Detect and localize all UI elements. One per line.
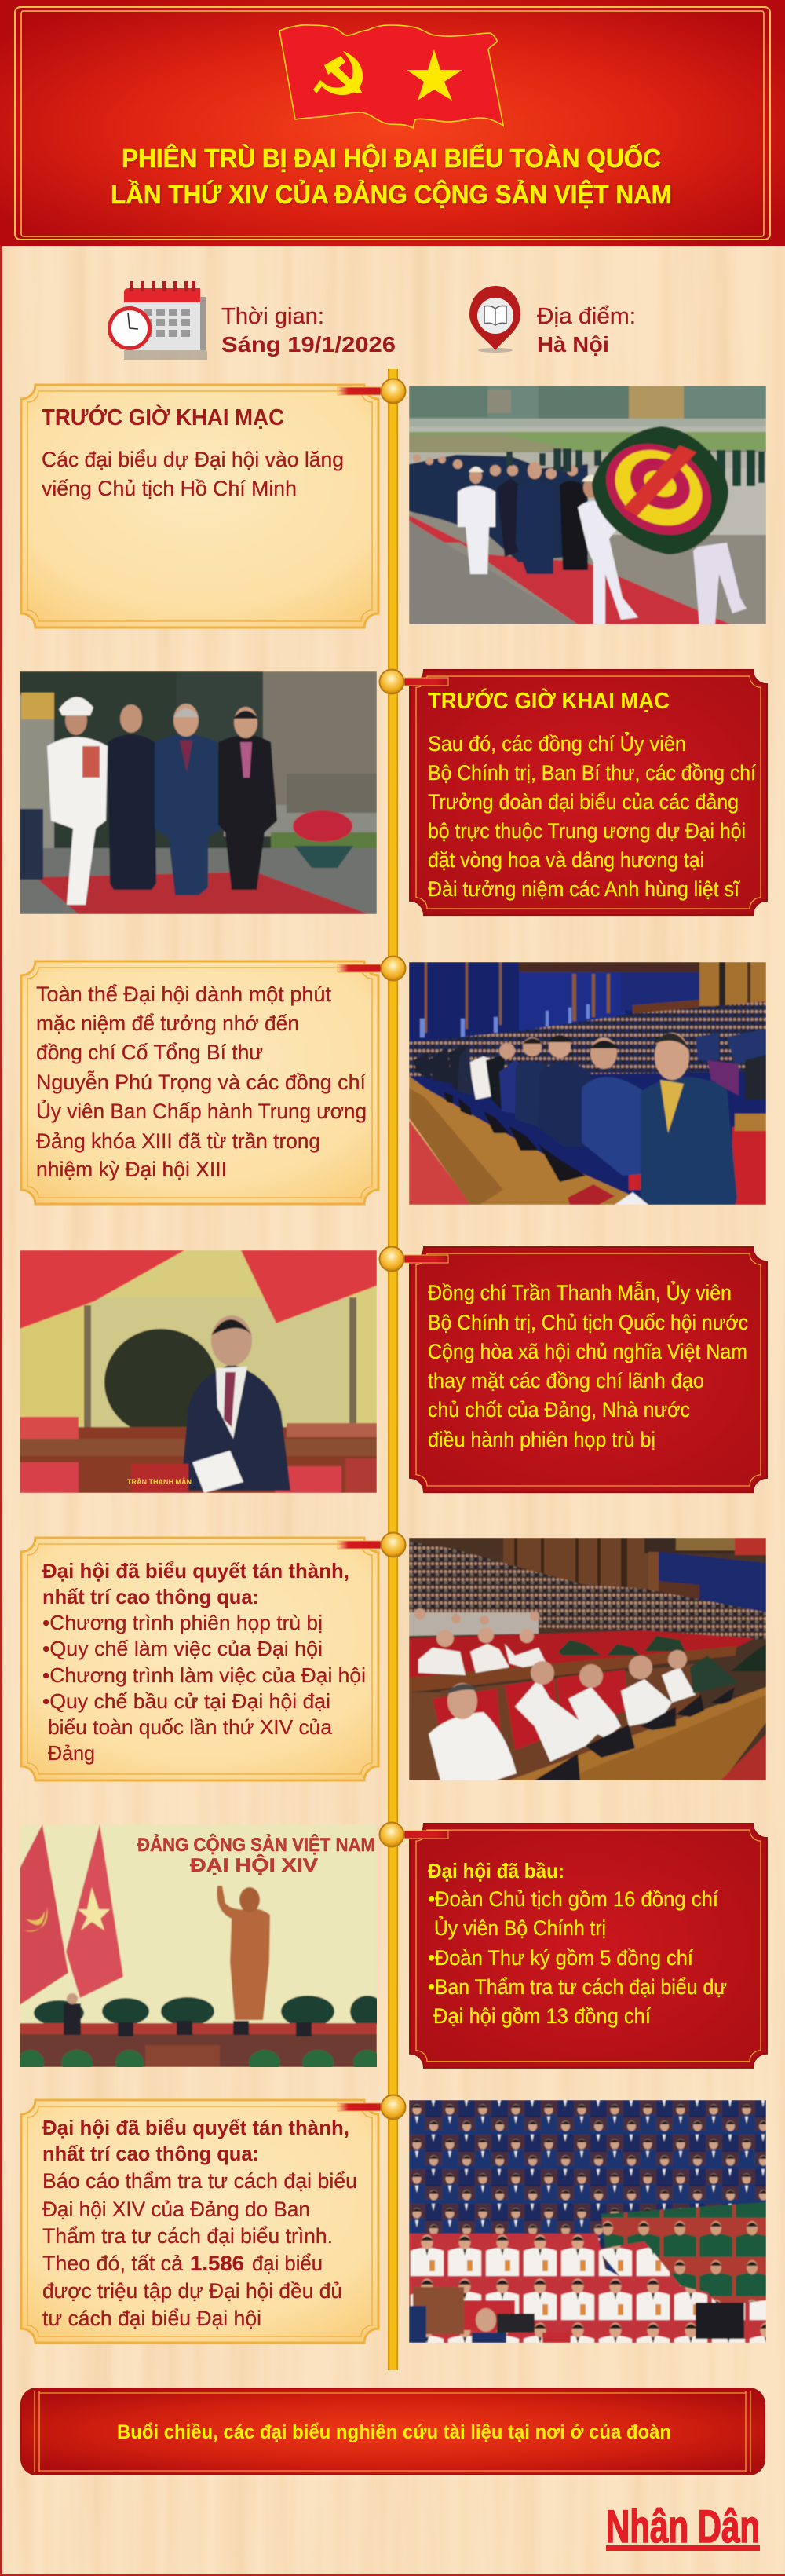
body text: đồng chí Cố Tổng Bí thư — [36, 1041, 263, 1064]
title: LẦN THỨ XIV CỦA ĐẢNG CỘNG SẢN VIỆT NAM — [111, 179, 672, 209]
body text: Bộ Chính trị, Chủ tịch Quốc hội nước — [428, 1311, 748, 1334]
time label: Thời gian: — [221, 304, 324, 329]
photo: leaders walking — [20, 671, 377, 914]
icon: party flag — [279, 25, 503, 128]
body text: 1.586 — [190, 2252, 244, 2275]
body text: thay mặt các đồng chí lãnh đạo — [428, 1369, 704, 1392]
connector: ribbon 4 — [404, 1255, 448, 1263]
connector: ribbon 6 — [404, 1831, 448, 1839]
bullet list: •Quy chế bầu cử tại Đại hội đại — [42, 1689, 330, 1713]
body text: Thẩm tra tư cách đại biểu trình. — [42, 2224, 333, 2248]
header banner — [0, 0, 785, 246]
title: PHIÊN TRÙ BỊ ĐẠI HỘI ĐẠI BIỂU TOÀN QUỐC — [122, 143, 661, 173]
name plate: TRẦN THANH MẪN — [127, 1477, 192, 1486]
body text: tư cách đại biểu Đại hội — [42, 2307, 261, 2330]
photo: minute of silence — [409, 962, 766, 1205]
body text: Toàn thể Đại hội dành một phút — [36, 982, 331, 1006]
body text: Đài tưởng niệm các Anh hùng liệt sĩ — [428, 877, 740, 901]
location label: Địa điểm: — [537, 304, 636, 329]
body text: Trưởng đoàn đại biểu của các đảng — [428, 790, 739, 814]
connector: ribbon 2 — [404, 678, 448, 686]
panel: step 1 text — [21, 385, 378, 628]
bold lead: Đại hội đã bầu: — [428, 1859, 564, 1883]
bold lead: nhất trí cao thông qua: — [42, 1585, 259, 1608]
stage sign: ĐẢNG CỘNG SẢN VIỆT NAM — [137, 1833, 375, 1856]
photo: congress stage — [17, 1824, 385, 2075]
photo: delegates voting — [409, 1538, 766, 1780]
location label — [537, 304, 636, 357]
connector: ribbon 3 — [338, 964, 381, 972]
body text — [42, 448, 344, 500]
icon: calendar with clock — [108, 281, 207, 360]
heading: TRƯỚC GIỜ KHAI MẠC — [428, 687, 670, 714]
body text: Cộng hòa xã hội chủ nghĩa Việt Nam — [428, 1340, 747, 1363]
connector: ribbon 7 — [338, 2103, 381, 2111]
afternoon banner — [21, 2388, 765, 2475]
timeline spine — [388, 369, 398, 2370]
panel: step 3 text — [21, 961, 378, 1204]
bold lead: Đại hội đã biểu quyết tán thành, — [42, 1559, 349, 1583]
body text: chủ chốt của Đảng, Nhà nước — [428, 1398, 690, 1422]
timeline knobs — [380, 379, 405, 2119]
bold lead: Đại hội đã biểu quyết tán thành, — [42, 2116, 349, 2139]
bullet list: biểu toàn quốc lần thứ XIV của — [48, 1715, 333, 1739]
connector: ribbon 5 — [338, 1541, 381, 1549]
body text: Ủy viên Ban Chấp hành Trung ương — [36, 1098, 367, 1123]
panel: step 2 text — [410, 670, 767, 915]
banner text: Buổi chiều, các đại biểu nghiên cứu tài liệu tại nơi ở của đoàn — [117, 2421, 671, 2443]
icon: yellow star — [407, 49, 462, 101]
location label: Hà Nội — [537, 332, 609, 357]
time label — [221, 304, 396, 357]
body text: Đại hội XIV của Đảng do Ban — [42, 2197, 310, 2221]
bullet list: Ủy viên Bộ Chính trị — [434, 1915, 606, 1940]
heading: TRƯỚC GIỜ KHAI MẠC — [42, 404, 284, 430]
bullet list: •Quy chế làm việc của Đại hội — [42, 1637, 323, 1660]
body text: Bộ Chính trị, Ban Bí thư, các đồng chí — [428, 761, 756, 785]
title — [111, 143, 672, 209]
panel: step 5 text — [21, 1538, 378, 1780]
body text: Sau đó, các đồng chí Ủy viên — [428, 730, 686, 756]
body text: Báo cáo thẩm tra tư cách đại biểu — [42, 2169, 357, 2193]
body text: Các đại biểu dự Đại hội vào lăng — [42, 448, 344, 471]
photo: delegates applauding — [409, 2100, 766, 2343]
photo: speaker at podium — [20, 1250, 377, 1493]
bullet list: Đại hội gồm 13 đồng chí — [433, 2004, 651, 2028]
body text — [36, 982, 367, 1181]
icon: hammer and sickle — [313, 51, 363, 95]
panel: step 4 text — [410, 1247, 767, 1492]
bullet list: •Đoàn Chủ tịch gồm 16 đồng chí — [428, 1887, 718, 1911]
bullet list: •Chương trình phiên họp trù bị — [42, 1611, 323, 1634]
bold lead — [42, 2116, 349, 2165]
connector: ribbon 1 — [338, 387, 381, 395]
body text: viếng Chủ tịch Hồ Chí Minh — [42, 477, 297, 500]
bullet list — [428, 1887, 727, 2028]
panel: step 6 text — [410, 1824, 767, 2068]
body text: mặc niệm để tưởng nhớ đến — [36, 1012, 299, 1035]
stage sign — [137, 1833, 375, 1876]
stage sign: ĐẠI HỘI XIV — [190, 1854, 318, 1876]
icon: location pin — [469, 286, 520, 353]
panel: step 7 text — [21, 2100, 378, 2343]
bullet list: •Đoàn Thư ký gồm 5 đồng chí — [428, 1946, 693, 1970]
bullet list: Đảng — [48, 1741, 95, 1765]
time label: Sáng 19/1/2026 — [221, 332, 396, 357]
bold lead: nhất trí cao thông qua: — [42, 2142, 259, 2165]
body text: được triệu tập dự Đại hội đều đủ — [42, 2279, 342, 2303]
body text — [428, 730, 756, 901]
bold lead — [42, 1559, 349, 1608]
body text: điều hành phiên họp trù bị — [428, 1428, 655, 1451]
body text: Đồng chí Trần Thanh Mẫn, Ủy viên — [428, 1279, 732, 1304]
body text: bộ trực thuộc Trung ương dự Đại hội — [428, 819, 746, 843]
body text: Nguyễn Phú Trọng và các đồng chí — [36, 1070, 366, 1094]
bullet list — [42, 1611, 366, 1765]
body text: nhiệm kỳ Đại hội XIII — [36, 1158, 227, 1181]
body text: Theo đó, tất cả — [42, 2252, 184, 2275]
body text: Đảng khóa XIII đã từ trần trong — [36, 1129, 320, 1153]
body text: đại biểu — [252, 2252, 323, 2275]
body text — [428, 1279, 748, 1451]
bullet list: •Chương trình làm việc của Đại hội — [42, 1663, 366, 1687]
body text: đặt vòng hoa và dâng hương tại — [428, 848, 704, 872]
photo: wreath procession — [409, 386, 766, 624]
body text — [42, 2169, 357, 2330]
bullet list: •Ban Thẩm tra tư cách đại biểu dự — [428, 1975, 727, 1999]
